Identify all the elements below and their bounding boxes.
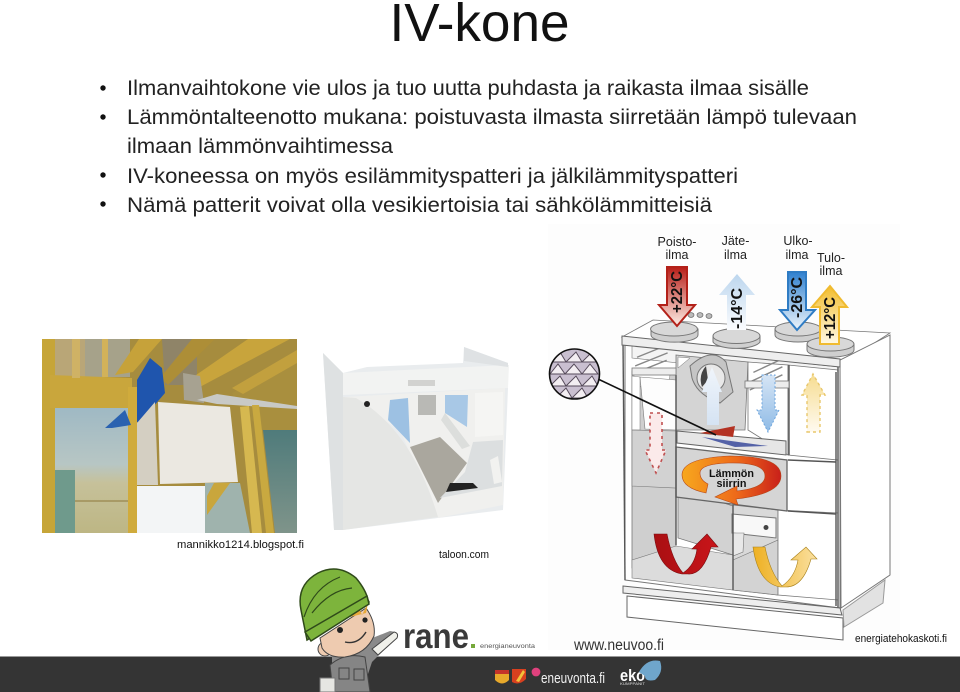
arrow: internal air, red dashed — [645, 413, 666, 473]
heat exchanger panel — [676, 426, 787, 511]
icon: heat transfer swirl: Lämmön — [709, 468, 754, 480]
logo: rane — [403, 617, 535, 656]
photo: installed ventilation unit — [42, 339, 297, 533]
logo: neuvoo: www.neuvoo.fi — [573, 637, 664, 654]
arrow: Tuloilma +12°C — [812, 286, 847, 344]
arrow: Ulkoilma -26°C — [780, 272, 815, 330]
bullet list: Nämä patterit voivat olla vesikiertoisia tai sähkölämmitteisiä — [127, 194, 712, 217]
top plate edge — [622, 336, 840, 367]
labels: air streams: Jäte- — [722, 234, 749, 248]
caption: photo 2 source: taloon.com — [439, 549, 489, 561]
icon: exchanger texture magnifier — [550, 349, 716, 435]
cabinet side lines — [623, 340, 838, 608]
arrow: internal air, yellow — [802, 374, 825, 432]
labels: air streams: Tulo- — [817, 251, 845, 265]
fan — [690, 355, 733, 403]
filter slats — [633, 346, 782, 390]
footer bar — [0, 656, 960, 692]
control buttons — [688, 313, 712, 318]
caption: diagram source: energiatehokaskoti.fi — [855, 633, 947, 645]
unit base — [623, 580, 885, 640]
arrow: Poistoilma +22°C — [659, 267, 695, 326]
mascot: builder with green helmet — [300, 569, 398, 692]
arrow: Poistoilma +22°C: +22°C — [669, 271, 686, 313]
bullet list — [100, 77, 857, 217]
logo: rane: energianeuvonta — [480, 643, 535, 650]
photo: opened ventilation unit — [323, 347, 509, 530]
icon: heat transfer swirl: siirrin — [716, 478, 747, 490]
caption: photo 1 source: mannikko1214.blogspot.fi — [177, 539, 304, 551]
logo: rane: rane — [403, 617, 469, 656]
bullet list: Ilmanvaihtokone vie ulos ja tuo uutta puhdasta ja raikasta ilmaa sisälle — [127, 77, 809, 100]
arrow: internal air, ice — [702, 367, 722, 425]
logo: eko kumppanit — [620, 660, 661, 686]
labels: air streams: Poisto- — [658, 235, 696, 249]
unit cabinet — [622, 320, 890, 608]
logo: eko kumppanit: eko — [620, 666, 645, 685]
bullet list: Lämmöntalteenotto mukana: poistuvasta ilmasta siirretään lämpö tulevaan — [127, 106, 857, 129]
logo: eneuvonta.fi — [532, 668, 605, 687]
labels: air streams: ilma — [786, 248, 809, 262]
labels: air streams: ilma — [820, 264, 843, 278]
arrow: red return curl — [654, 534, 718, 574]
arrow: Ulkoilma -26°C: -26°C — [789, 277, 806, 318]
labels: air streams: ilma — [724, 248, 747, 262]
arrow: internal air, blue — [757, 375, 779, 432]
logo: municipal crests — [495, 669, 526, 684]
labels: air streams: Ulko- — [783, 234, 813, 248]
diagram: ventilation unit cross-section — [548, 224, 900, 654]
icon: heat transfer swirl — [682, 456, 781, 505]
logo: eneuvonta.fi: eneuvonta.fi — [541, 670, 605, 687]
arrow: Tuloilma +12°C: +12°C — [822, 297, 839, 339]
duct collars — [650, 322, 854, 357]
arrow: Jäteilma -14°C: -14°C — [729, 288, 746, 329]
bullet list: ilmaan lämmönvaihtimessa — [127, 135, 393, 158]
arrow: Jäteilma -14°C — [719, 274, 755, 330]
bullet list: IV-koneessa on myös esilämmityspatteri ja jälkilämmityspatteri — [127, 165, 738, 188]
arrow: yellow return curl — [753, 547, 817, 587]
labels: air streams: ilma — [666, 248, 689, 262]
labels: air streams — [658, 234, 845, 278]
logo: eko kumppanit: KUMPPANIT — [620, 682, 646, 686]
